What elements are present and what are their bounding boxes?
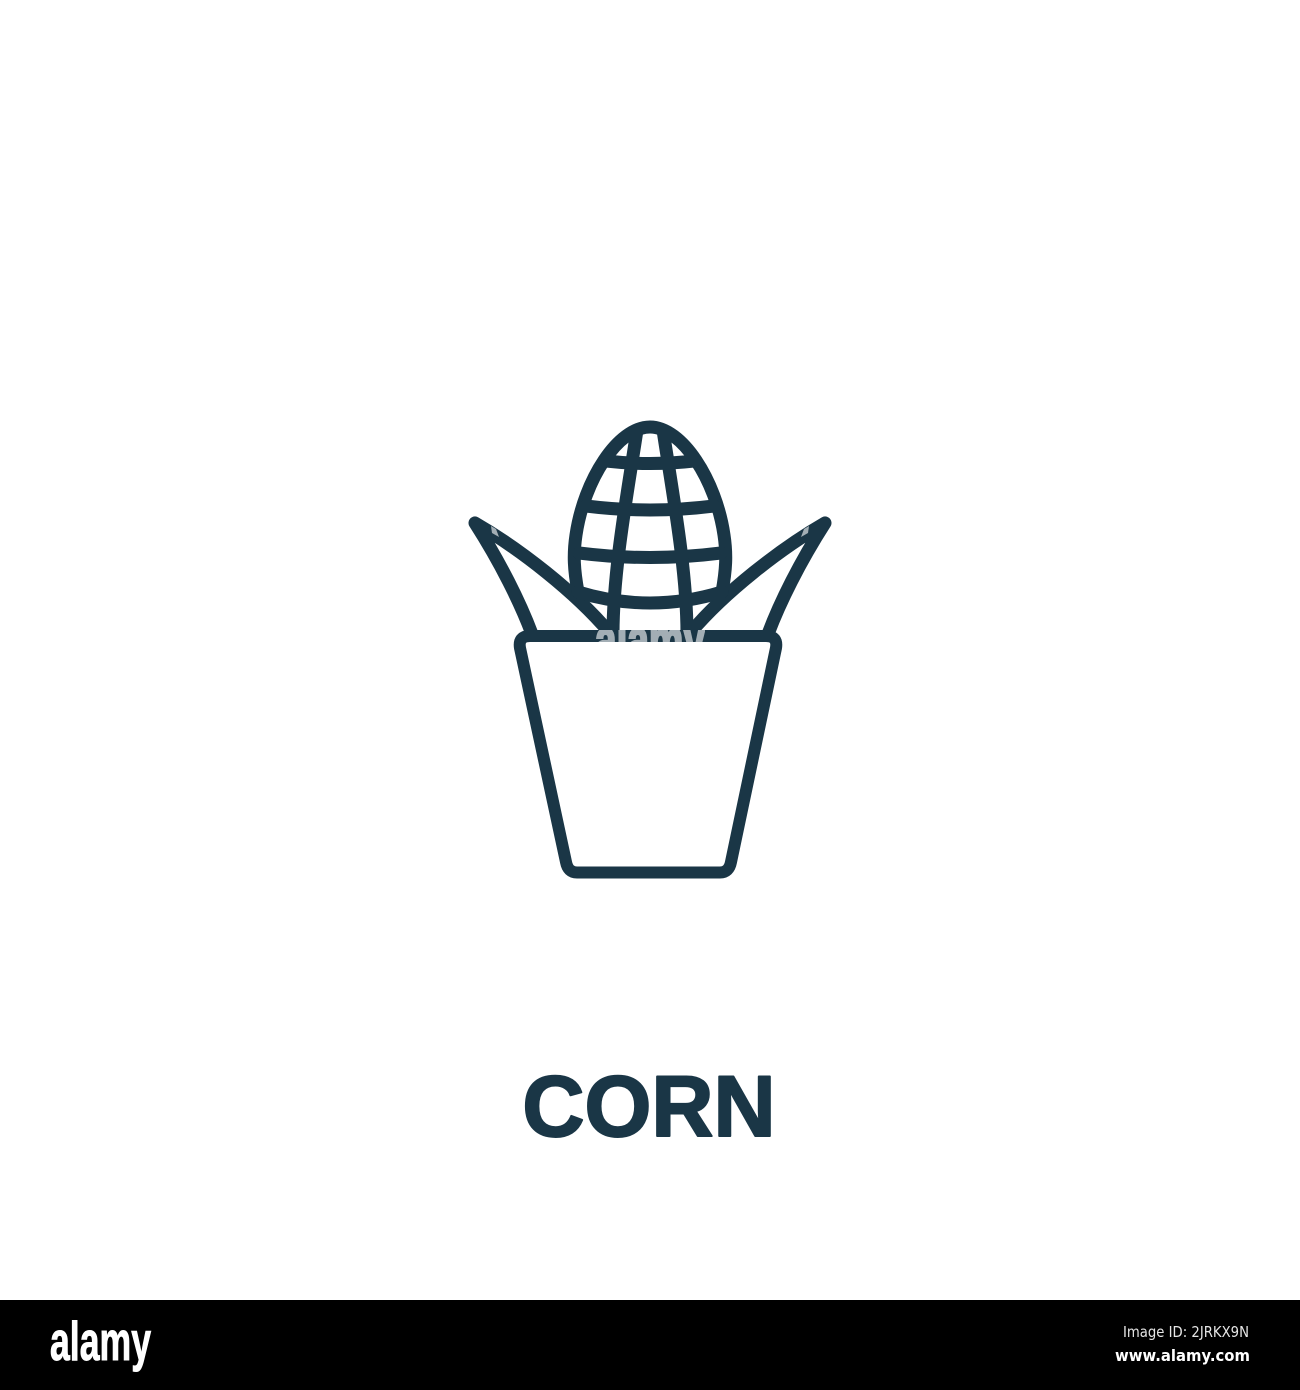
watermark: left leaf fragment [491, 526, 499, 537]
icon: left leaf [475, 523, 609, 634]
footer bar [0, 1300, 1300, 1390]
icon: corn kernel columns [613, 430, 687, 634]
website: www.alamy.com [1115, 1346, 1250, 1365]
logo: alamy: alamy [50, 1310, 151, 1372]
icon: corn cob outline [574, 427, 726, 592]
watermark: alamy over pot rim: alamy [595, 608, 705, 673]
title: CORN: CORN [522, 1059, 776, 1155]
watermark: right leaf fragment [801, 526, 809, 537]
icon: right leaf [691, 523, 825, 634]
icon: corn kernel rows [578, 461, 722, 603]
icon: corn in pot [475, 427, 825, 872]
image id: Image ID: 2JRKX9N [1123, 1323, 1249, 1341]
icon: pot [520, 636, 776, 872]
